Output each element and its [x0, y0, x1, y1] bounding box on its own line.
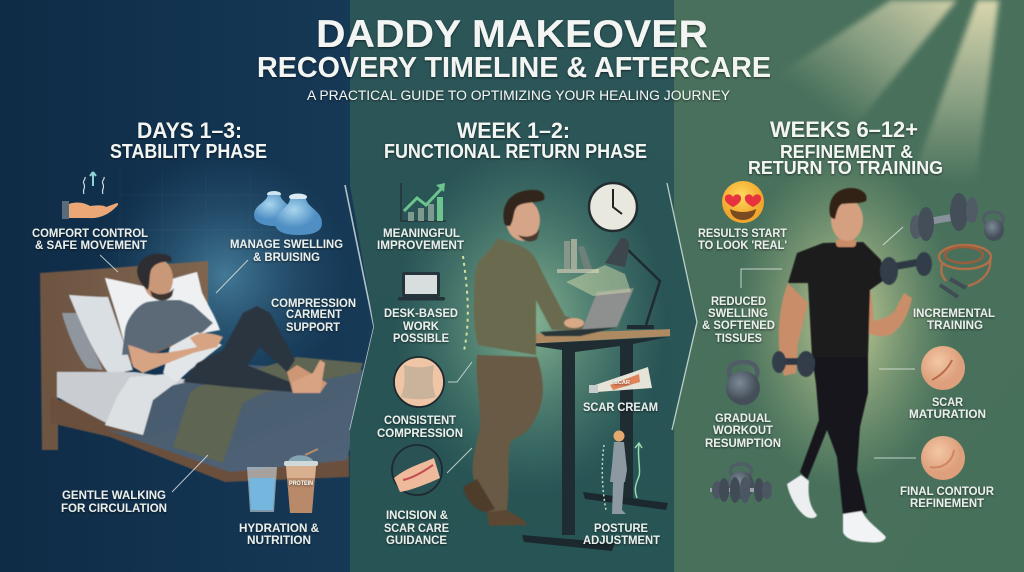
title block: A PRACTICAL GUIDE TO OPTIMIZING YOUR HEALING JOURNEY [307, 88, 730, 103]
label: final contour refinement: REFINEMENT [910, 498, 984, 510]
heading: weeks 6-12+: REFINEMENT & [780, 141, 913, 162]
label: gentle walking for circulation [61, 490, 167, 515]
label: desk-based work possible [384, 308, 458, 345]
illustration: standing desk [503, 329, 673, 551]
label: compression garment support [271, 298, 356, 334]
illustration: man resting in bed [40, 254, 363, 482]
label: comfort control and safe movement: & SAFE MOVEMENT [35, 240, 147, 252]
label: manage swelling and bruising [230, 239, 343, 264]
label: consistent compression [377, 415, 463, 440]
label: manage swelling and bruising: MANAGE SWELLING [230, 239, 343, 251]
title block: DADDY MAKEOVER [316, 13, 708, 56]
icon: rising bar chart [401, 183, 446, 221]
label: reduced swelling and softened tissues: SWELLING [708, 308, 768, 320]
label: manage swelling and bruising: & BRUISING [253, 252, 320, 264]
label: incision and scar care guidance: SCAR CARE [384, 523, 449, 535]
illustration: man working at laptop [463, 190, 634, 526]
label: incision and scar care guidance: INCISION & [386, 510, 448, 522]
label: reduced swelling and softened tissues: & SOFTENED [702, 320, 775, 332]
label: incremental training [913, 308, 995, 332]
icon: final contour [921, 436, 965, 480]
label: posture adjustment [583, 523, 660, 547]
label: scar cream: SCAR CREAM [583, 402, 658, 414]
label: hydration and nutrition: HYDRATION & [239, 523, 319, 535]
label: posture adjustment: ADJUSTMENT [583, 535, 660, 547]
label: gradual workout resumption: WORKOUT [713, 425, 773, 437]
heading: weeks 6-12+: WEEKS 6–12+ [770, 117, 918, 142]
panel: weeks 6-12+ refinement and return to training [667, 0, 1024, 572]
illustration: desk lamp and light [566, 238, 660, 329]
heading: days 1-3: STABILITY PHASE [110, 140, 267, 163]
title block [257, 13, 771, 103]
label: scar maturation: MATURATION [909, 409, 986, 421]
icon: protein shake: PROTEIN [289, 481, 313, 487]
label: compression garment support: SUPPORT [286, 322, 340, 334]
label: meaningful improvement: MEANINGFUL [383, 228, 460, 240]
icon: protein shake [284, 449, 318, 513]
label: posture adjustment: POSTURE [594, 523, 648, 535]
label: consistent compression: CONSISTENT [384, 415, 456, 427]
label: gradual workout resumption: RESUMPTION [705, 438, 781, 450]
icon: ice packs [254, 191, 322, 235]
label: meaningful improvement: IMPROVEMENT [377, 240, 464, 252]
label: final contour refinement: FINAL CONTOUR [900, 486, 995, 498]
panel: week 1-2 functional return phase [350, 0, 675, 572]
label: desk-based work possible: DESK-BASED [384, 308, 458, 320]
label: gentle walking for circulation: FOR CIRCULATION [61, 503, 167, 515]
label: reduced swelling and softened tissues: REDUCED [711, 296, 766, 308]
heading: days 1-3 [110, 122, 267, 160]
label: desk-based work possible: POSSIBLE [393, 333, 449, 345]
illustration: bookshelf [557, 239, 599, 273]
label: hydration and nutrition [239, 523, 319, 547]
icon: dumbbell and kettlebell [910, 193, 1004, 241]
label: results start to look real: TO LOOK 'REAL' [698, 240, 787, 252]
icon: water glass [247, 467, 277, 512]
label: incision and scar care guidance: GUIDANCE [386, 535, 447, 547]
panel: days 1-3 stability phase [0, 0, 380, 572]
label: comfort control and safe movement [32, 228, 148, 252]
heading: weeks 6-12+: RETURN TO TRAINING [748, 157, 943, 178]
icon: incision [392, 445, 442, 495]
icon: scar cream tube [589, 367, 652, 393]
icon: compression garment [394, 357, 444, 407]
heading: weeks 6-12+ [748, 117, 943, 178]
icon: wall clock [589, 183, 637, 231]
icon: resistance rope [939, 245, 991, 297]
label: scar maturation: SCAR [932, 397, 964, 409]
label: scar maturation [909, 397, 986, 421]
heading: week 1-2: FUNCTIONAL RETURN PHASE [384, 140, 647, 163]
label: gentle walking for circulation: GENTLE WALKING [62, 490, 166, 502]
label: results start to look real: RESULTS START [698, 228, 787, 240]
title block: RECOVERY TIMELINE & AFTERCARE [257, 52, 771, 84]
label: results start to look real [698, 228, 787, 252]
label: reduced swelling and softened tissues [702, 296, 775, 345]
label: desk-based work possible: WORK [403, 321, 440, 333]
icon: laptop [398, 272, 445, 300]
label: comfort control and safe movement: COMFORT CONTROL [32, 228, 148, 240]
label: final contour refinement [900, 486, 995, 510]
label: gradual workout resumption: GRADUAL [715, 413, 771, 425]
label: reduced swelling and softened tissues: TISSUES [715, 333, 762, 345]
icon: heart eyes emoji [722, 181, 764, 223]
label: incision and scar care guidance [384, 510, 449, 547]
heading: week 1-2 [384, 118, 647, 163]
label: consistent compression: COMPRESSION [377, 428, 463, 440]
label: hydration and nutrition: NUTRITION [247, 535, 311, 547]
icon: scar cream tube: SCAR [614, 380, 630, 386]
icon: posture figure [602, 430, 642, 514]
heading: days 1-3: DAYS 1–3: [137, 118, 242, 143]
label: gradual workout resumption [705, 413, 781, 450]
icon: kettlebell and dumbbell set [710, 464, 772, 503]
icon: kettlebell [726, 362, 760, 405]
heading: week 1-2: WEEK 1–2: [457, 118, 570, 143]
label: incremental training: TRAINING [927, 320, 983, 332]
icon: scar maturation [921, 346, 965, 390]
label: compression garment support: CARMENT [286, 309, 342, 321]
illustration: man lifting a dumbbell [772, 188, 932, 542]
icon: open hand with rising arrows [62, 172, 118, 219]
label: incremental training: INCREMENTAL [913, 308, 995, 320]
label: meaningful improvement [377, 228, 464, 252]
label: compression garment support: COMPRESSION [271, 298, 356, 310]
